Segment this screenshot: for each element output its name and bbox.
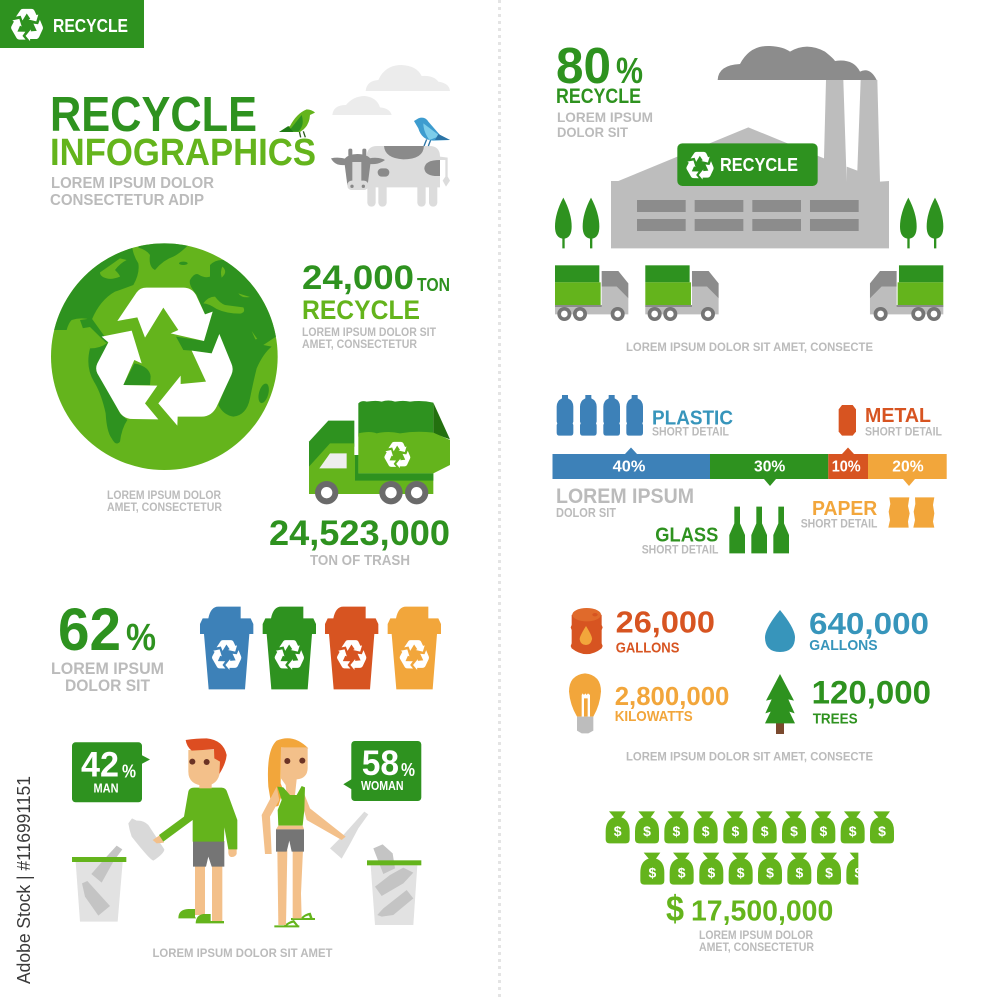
stat: tons of trash: TON OF TRASH [310,552,410,569]
money bags: $ [825,864,833,880]
savings caption: LOREM IPSUM DOLOR SIT AMET, CONSECTE [626,752,873,764]
stat: trees: TREES [813,710,858,727]
icon: recycle [11,9,43,41]
factory [611,46,889,248]
coloured recycling bins [200,607,441,689]
stat: 62 percent: DOLOR SIT [65,676,151,695]
stock id: Adobe Stock | #116991151 [14,776,34,984]
stat: 24,000 ton recycle: RECYCLE [302,295,420,325]
money bags: $ [707,864,715,880]
globe caption: AMET, CONSECTETUR [107,502,223,514]
callout: woman 58 percent: WOMAN [361,778,404,793]
money bags: $ [819,823,827,839]
icon: green garbage truck [309,400,450,504]
label: glass [642,525,718,557]
trees by factory [555,198,943,248]
callout: man 42 percent: 42 [81,746,119,785]
sign icon [686,152,714,179]
stat: 26,000 gallons: 26,000 [616,605,715,640]
segmented bar: materials share [552,448,947,486]
stat: 80 percent recycle: % [616,50,643,91]
money bags: $ [614,823,622,839]
stat: kilowatts [615,681,729,725]
person: woman [262,738,346,927]
truck 2 [645,265,719,321]
factory caption: LOREM IPSUM DOLOR SIT AMET, CONSECTE [626,342,873,354]
segmented bar: materials share: 20% [892,459,924,476]
big recycle arrows [96,288,233,426]
stat: 62 percent [51,596,164,695]
stat: 640,000 gallons: 640,000 [809,606,929,641]
money bags: $ [643,823,651,839]
stat: 80 percent recycle: RECYCLE [556,85,641,108]
stat: 62 percent: 62 [58,596,121,663]
stat: 24,000 ton recycle: LOREM IPSUM DOLOR SIT [302,325,437,339]
stat: 62 percent: % [126,617,156,659]
stat: 80 percent recycle: 80 [556,37,611,94]
money bags: $ [737,864,745,880]
stat: 26,000 gallons [616,605,715,656]
money bags: $ [766,864,774,880]
label: plastic [652,407,733,439]
stat: 80 percent recycle [556,37,653,140]
clouds [332,65,450,115]
icon: cow [331,146,450,207]
person: man [153,738,237,923]
stat: 24,000 ton recycle: TON [417,275,450,295]
stat: 24,000 ton recycle [302,259,450,351]
badge label: RECYCLE [53,16,128,36]
bin: red [325,607,378,689]
factory windows [637,200,859,231]
truck 1 [555,265,628,321]
title: RECYCLE [50,88,257,142]
stat: 62 percent: LOREM IPSUM [51,659,164,678]
callout: man 42 percent: % [122,762,136,782]
smoke cloud [718,46,877,80]
icon: blue bird [414,118,450,146]
label: glass: SHORT DETAIL [642,545,718,557]
globe caption: LOREM IPSUM DOLOR [107,490,222,502]
dollars caption: LOREM IPSUM DOLOR [699,930,814,942]
subtitle: LOREM IPSUM DOLOR [51,175,214,192]
stat: 24,000 ton recycle: 24,000 [302,259,414,297]
money bags: $ [795,864,803,880]
stat: tons of trash: 24,523,000 [269,514,450,553]
globe caption [107,490,223,514]
label: glass: GLASS [655,525,718,547]
money bags: $ [731,823,739,839]
sign label: RECYCLE [720,155,798,175]
stat: dollars saved: $ [666,888,684,929]
icon: paper sheets [888,497,934,528]
subtitle [50,175,214,209]
icon: glass bottles [729,507,789,553]
callout: woman 58 percent [343,741,421,801]
title [50,88,316,174]
money bags: $ [854,864,862,880]
truck 3 [870,265,943,321]
label: plastic: PLASTIC [652,407,733,430]
money bags: $ [790,823,798,839]
bin: green [263,607,316,689]
bin: blue [200,607,253,689]
bin: orange [388,607,441,689]
segmented bar: materials share: 10% [832,459,861,476]
trash can: man [72,846,126,922]
icon: plastic bottles [557,395,643,436]
icon: water drop [765,610,795,652]
stat: 24,000 ton recycle: AMET, CONSECTETUR [302,337,417,351]
right bottle held [330,812,368,859]
factory sign [677,143,818,186]
label: metal: METAL [865,404,931,427]
bar caption [556,485,694,520]
stat: 80 percent recycle: DOLOR SIT [557,124,628,140]
callout: man 42 percent: MAN [94,781,118,796]
callout: man 42 percent [72,742,150,802]
segmented bar: materials share: 30% [754,459,785,476]
label: paper: SHORT DETAIL [801,519,877,531]
stat: 80 percent recycle: LOREM IPSUM [557,109,653,125]
stat: tons of trash [269,514,450,569]
money bags: $ [678,864,686,880]
dollars caption [699,930,815,954]
left bottle held [128,818,164,861]
icon: green bird [279,109,315,137]
label: metal [865,404,942,439]
money bags [606,811,894,885]
bar caption: DOLOR SIT [556,506,616,520]
label: metal: SHORT DETAIL [865,427,942,439]
label: paper [801,497,877,531]
continents [47,238,287,444]
stat: dollars saved [666,888,833,929]
bar caption: LOREM IPSUM [556,485,694,508]
stat: kilowatts: KILOWATTS [615,708,693,725]
icon: light bulb [569,673,601,733]
label: plastic: SHORT DETAIL [652,427,729,439]
label: paper: PAPER [812,497,877,520]
globe with recycle symbol [47,238,287,470]
icon: metal can [839,405,856,436]
stat: 26,000 gallons: GALLONS [616,639,679,656]
stat: 640,000 gallons [809,606,929,654]
money bags: $ [672,823,680,839]
money bags: $ [849,823,857,839]
trash can: woman [367,844,421,925]
money bags: $ [878,823,886,839]
people caption: LOREM IPSUM DOLOR SIT AMET [152,948,332,960]
title: INFOGRAPHICS [50,132,316,174]
callout: woman 58 percent: 58 [362,744,399,783]
stat: trees [812,674,931,727]
callout: woman 58 percent: % [401,760,415,780]
money bags: $ [761,823,769,839]
stat: kilowatts: 2,800,000 [615,681,729,711]
header badge [0,0,144,48]
stat: trees: 120,000 [812,674,931,710]
subtitle: CONSECTETUR ADIP [50,192,204,209]
stat: 640,000 gallons: GALLONS [809,637,878,654]
icon: oil barrel [571,608,603,654]
money bags: $ [702,823,710,839]
money bags: $ [648,864,656,880]
stat: dollars saved: 17,500,000 [691,896,833,928]
icon: pine tree [765,674,795,734]
dollars caption: AMET, CONSECTETUR [699,942,815,954]
segmented bar: materials share: 40% [613,459,645,476]
